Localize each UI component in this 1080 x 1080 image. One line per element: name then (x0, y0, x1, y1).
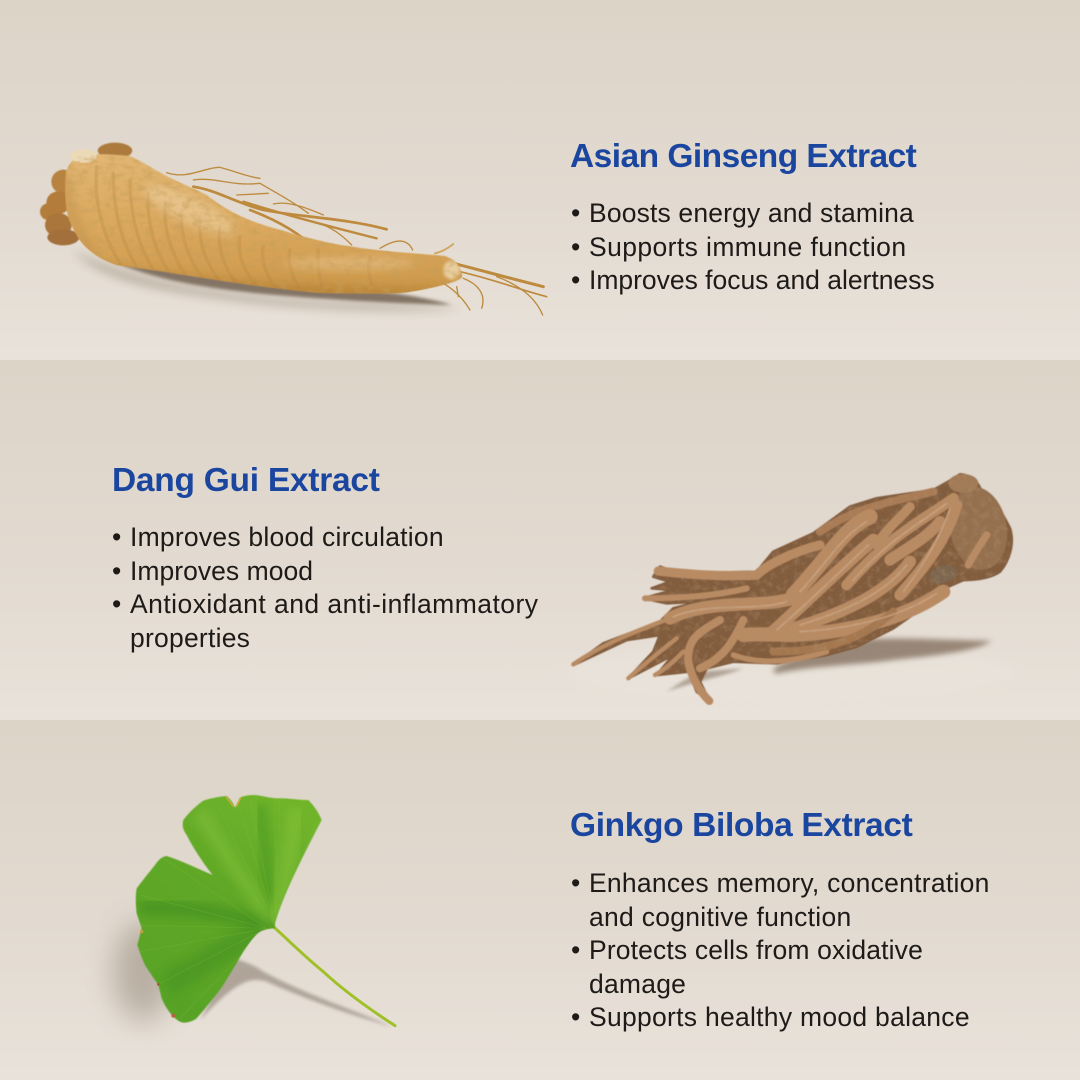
text block: ginseng benefits: Improves focus and alertness (589, 265, 935, 295)
heading: Asian Ginseng Extract: Asian Ginseng Extract (570, 138, 916, 175)
text block: ginkgo benefits: • (571, 1002, 580, 1032)
text block: ginkgo benefits: Enhances memory, concentration (589, 868, 990, 898)
text block: ginkgo benefits: Supports healthy mood balance (589, 1002, 970, 1032)
text block: ginseng benefits: • (571, 265, 580, 295)
text block: dang gui benefits: • (112, 589, 121, 619)
text block: dang gui benefits: properties (130, 622, 250, 652)
text block: ginkgo benefits: and cognitive function (589, 902, 852, 932)
text block: ginseng benefits (571, 198, 935, 295)
heading: Dang Gui Extract: Dang Gui Extract (112, 462, 380, 499)
text block: ginseng benefits: Boosts energy and stamina (589, 198, 914, 228)
heading: Ginkgo Biloba Extract: Ginkgo Biloba Extract (570, 807, 912, 844)
text block: ginkgo benefits: Protects cells from oxidative (589, 935, 923, 965)
text block: dang gui benefits: Improves blood circulation (130, 522, 444, 552)
icon: ginkgo leaf (113, 795, 395, 1027)
text block: ginkgo benefits: • (571, 935, 580, 965)
text block: ginkgo benefits: • (571, 868, 580, 898)
text block: dang gui benefits (112, 522, 538, 652)
text block: dang gui benefits: Antioxidant and anti-inflammatory (130, 589, 538, 619)
text block: dang gui benefits: Improves mood (130, 556, 313, 586)
text block: ginkgo benefits (571, 868, 990, 1032)
text block: dang gui benefits: • (112, 556, 121, 586)
text block: dang gui benefits: • (112, 522, 121, 552)
icon: ginseng root (40, 143, 547, 315)
text block: ginseng benefits: • (571, 232, 580, 262)
text block: ginseng benefits: Supports immune function (589, 232, 906, 262)
text block: ginseng benefits: • (571, 198, 580, 228)
text block: ginkgo benefits: damage (589, 968, 686, 998)
icon: dang gui root (563, 474, 1017, 702)
